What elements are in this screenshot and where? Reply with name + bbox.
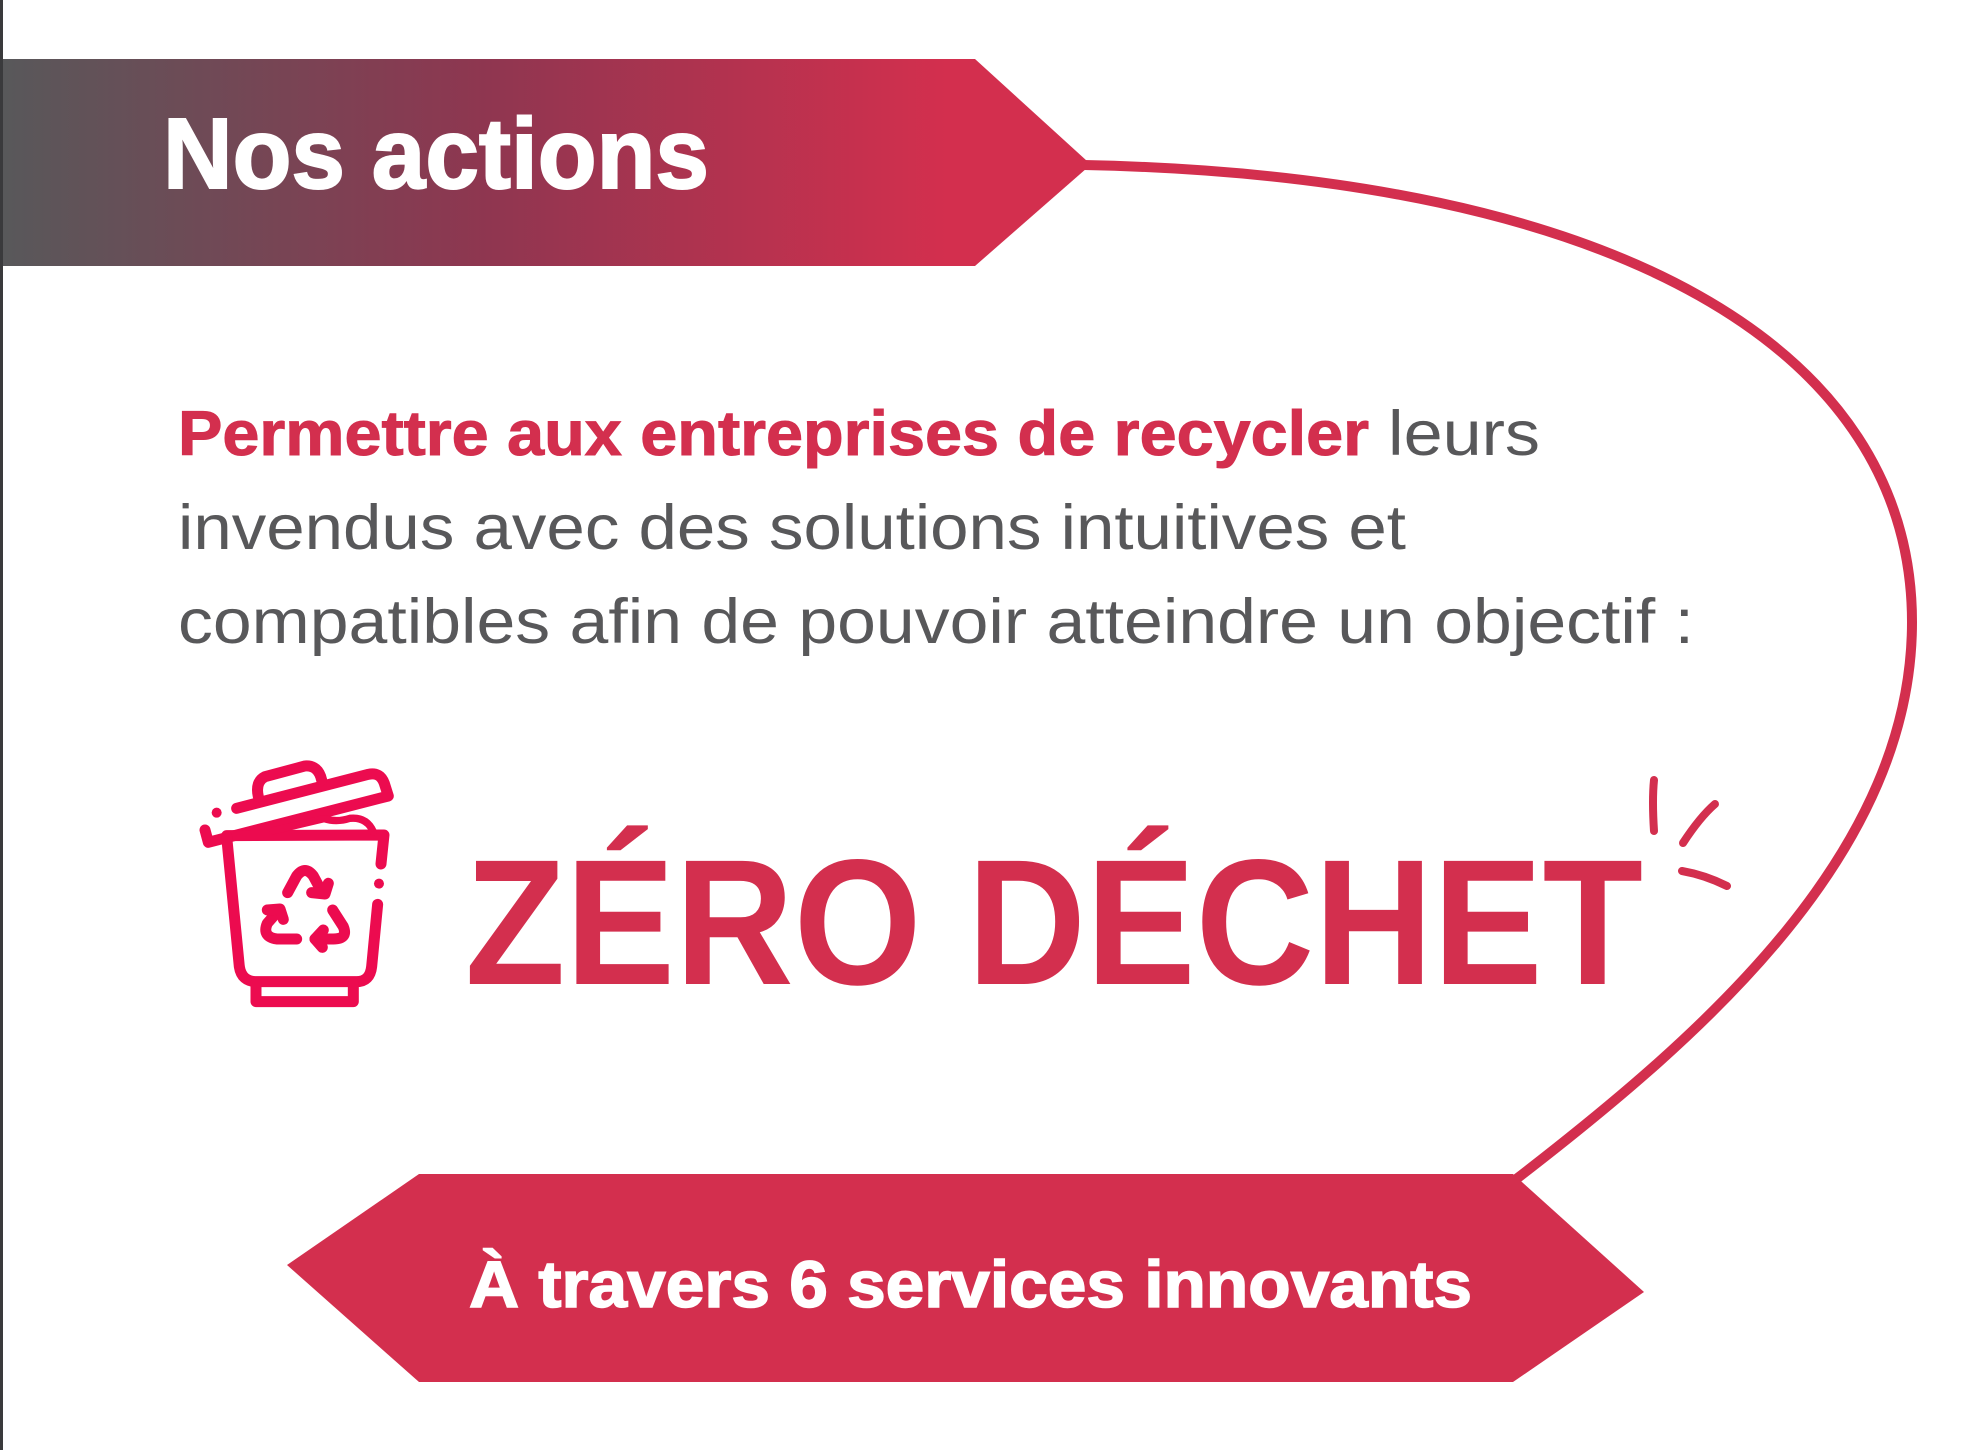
text block: intro paragraph: leurs <box>1388 399 1540 469</box>
bottom banner: services <box>287 1174 1644 1382</box>
text block: intro paragraph: invendus avec des solutions intuitives et <box>178 493 1407 563</box>
text block: intro paragraph: compatibles afin de pouvoir atteindre un objectif : <box>178 587 1694 657</box>
headline: ZÉRO DÉCHET: ZÉRO DÉCHET <box>465 822 1643 1022</box>
icon: emphasis sparks <box>1653 780 1727 886</box>
text block: intro paragraph: Permettre aux entreprises de recycler <box>178 399 1369 469</box>
banner text: À travers 6 services innovants <box>469 1247 1472 1321</box>
header banner: Nos actions <box>3 59 1087 266</box>
connector curve <box>1084 165 1912 1180</box>
heading: Nos actions: Nos actions <box>163 98 709 210</box>
text block: intro paragraph <box>178 399 1694 657</box>
icon: recycling bin <box>205 766 388 1002</box>
